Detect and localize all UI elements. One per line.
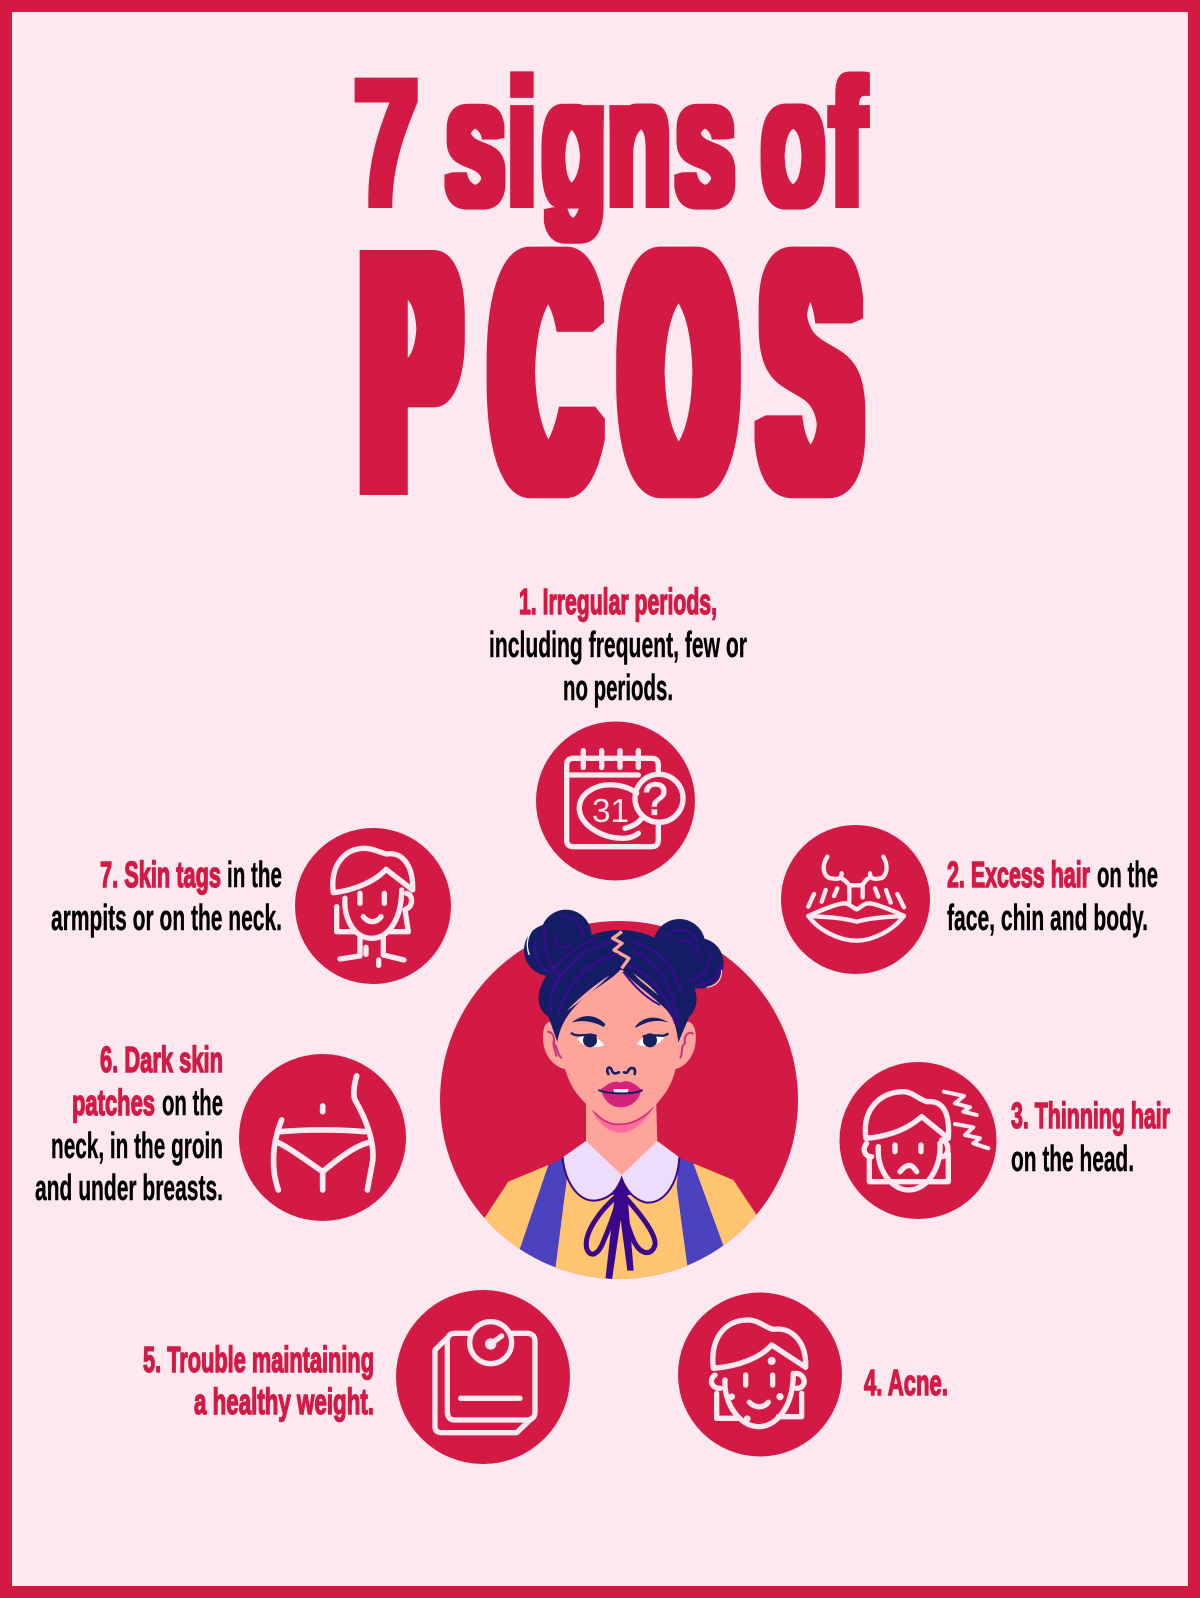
text: sign 7 skin tags — [51, 854, 282, 938]
title: 7 signs of: 7 signs of — [356, 48, 864, 239]
text: sign 6 dark skin patches: on the — [162, 1082, 223, 1123]
text: sign 2 excess hair — [947, 854, 1158, 938]
icon: face with acne — [678, 1292, 842, 1456]
text: sign 3 thinning hair — [1011, 1095, 1170, 1179]
mouth — [598, 1081, 643, 1107]
text: sign 6 dark skin patches: and under breasts. — [35, 1167, 223, 1208]
icon: face with skin tags — [295, 828, 451, 984]
text: sign 6 dark skin patches: neck, in the groin — [51, 1125, 223, 1166]
text: sign 7 skin tags: in the — [227, 854, 282, 895]
text: sign 5 trouble maintaining weight — [143, 1339, 374, 1422]
hair and buns — [524, 910, 724, 1042]
text: sign 7 skin tags: armpits or on the neck. — [51, 897, 282, 938]
face — [560, 970, 680, 1123]
icon: belly and underwear — [239, 1054, 406, 1221]
icon: calendar with question mark: ? — [643, 774, 668, 825]
ribbon bow — [586, 1178, 655, 1280]
neck shadow — [592, 1107, 653, 1133]
title: PCOS: PCOS — [367, 189, 853, 555]
neck — [586, 1093, 657, 1178]
icon: weighing scale — [396, 1290, 570, 1464]
icon: lips and nose with hair — [781, 825, 930, 974]
text: sign 7 skin tags: 7. Skin tags — [100, 854, 221, 895]
icon: calendar with question mark: 31 — [592, 793, 629, 830]
text: sign 6 dark skin patches — [35, 1039, 223, 1208]
text: sign 1 irregular periods: no periods. — [563, 667, 673, 708]
text: sign 1 irregular periods — [489, 581, 747, 708]
text: sign 1 irregular periods: 1. Irregular periods, — [519, 581, 717, 622]
text: sign 1 irregular periods: including frequent, few or — [489, 624, 747, 665]
illustration: woman portrait in red circle — [440, 910, 798, 1300]
text: sign 5 trouble maintaining weight: a healthy weight. — [194, 1381, 374, 1422]
text: sign 5 trouble maintaining weight: 5. Trouble maintaining — [143, 1339, 374, 1380]
shirt and straps — [484, 1158, 756, 1279]
icon: sad face with thinning hair — [840, 1062, 996, 1219]
text: sign 6 dark skin patches: patches — [72, 1082, 155, 1123]
ears — [543, 1022, 696, 1069]
text: sign 2 excess hair: 2. Excess hair — [947, 854, 1090, 895]
collar — [563, 1141, 679, 1203]
red background circle — [440, 921, 798, 1279]
nose — [607, 1068, 635, 1074]
eyebrows and eyes — [571, 1016, 669, 1047]
icon: calendar with question mark — [536, 722, 695, 880]
text: sign 4 acne: 4. Acne. — [864, 1362, 948, 1403]
text: sign 6 dark skin patches: 6. Dark skin — [100, 1039, 223, 1080]
